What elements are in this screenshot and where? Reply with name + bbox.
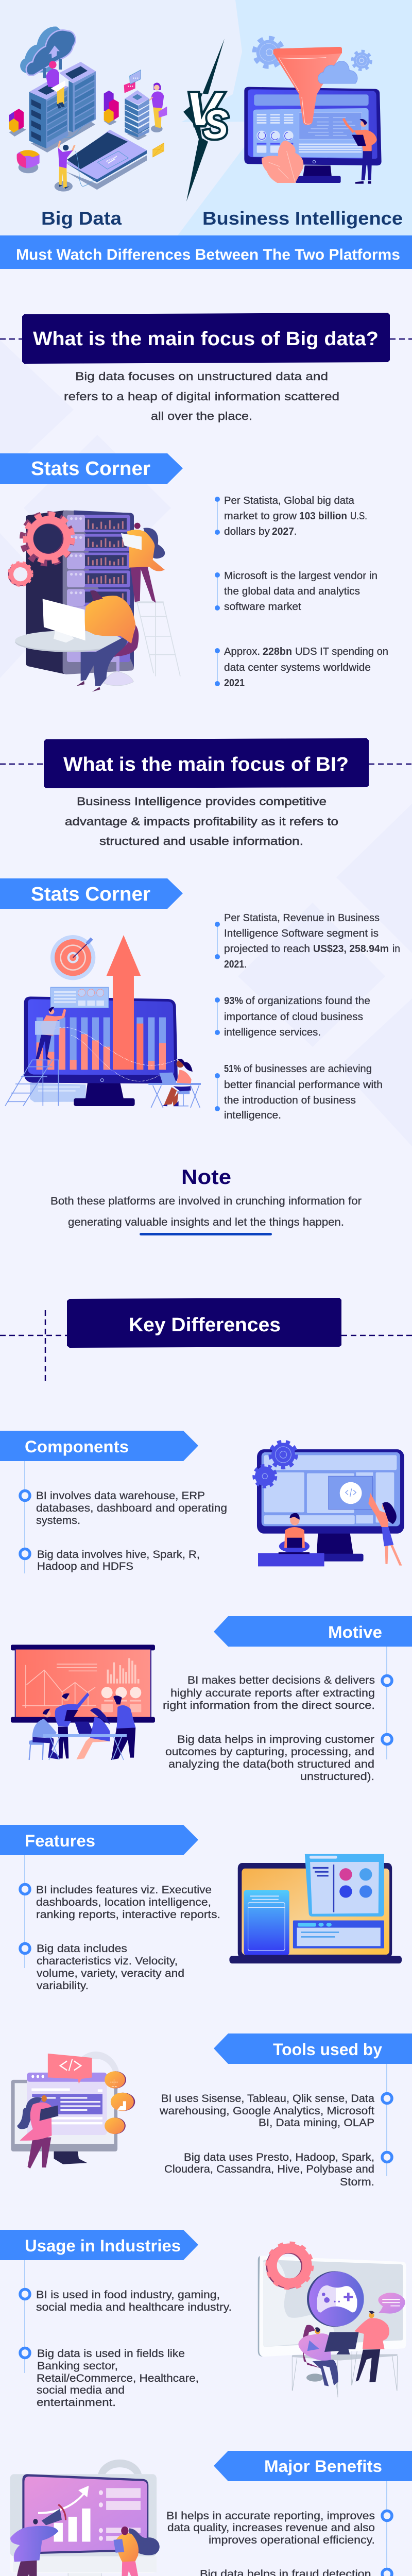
stat: global big data market: U.S. xyxy=(350,511,367,522)
text: BI features: BI includes features viz. Executive xyxy=(36,1884,212,1896)
text: BI benefits: data quality, increases revenue and also xyxy=(167,2522,375,2534)
text: big data usage: Banking sector, xyxy=(37,2360,118,2372)
stat: global big data market xyxy=(224,495,367,537)
stat: cloud BI: importance of cloud business xyxy=(224,1011,363,1023)
illustration: marketing monitor xyxy=(10,2463,160,2576)
ribbon xyxy=(0,2230,198,2260)
stat: microsoft vendor: the global data and analytics xyxy=(224,586,360,597)
stat: data center spending: 2021 xyxy=(224,677,245,689)
stat: BI software revenue: Intelligence Software segment is xyxy=(224,928,379,939)
stat: cloud BI: of organizations found the xyxy=(246,995,370,1007)
ribbon: Components xyxy=(25,1437,129,1456)
text: BI usage: social media and healthcare industry. xyxy=(36,2301,232,2313)
icon: VS lightning bolt xyxy=(183,39,228,201)
text: big data motive: unstructured). xyxy=(300,1771,374,1783)
text block: big data focus: Big data focuses on unstructured data and xyxy=(75,370,328,383)
envelope icon xyxy=(153,143,164,157)
text: BI benefits xyxy=(166,2510,375,2546)
stat: microsoft vendor: Microsoft is the largest vendor in xyxy=(224,570,377,582)
text block: BI focus: advantage & impacts profitability as it refers to xyxy=(65,815,338,828)
donut chart xyxy=(17,150,40,168)
section: features xyxy=(0,1825,402,1992)
stats list: big data xyxy=(215,495,388,689)
heading: key differences xyxy=(0,1298,412,1384)
funnel xyxy=(273,47,342,125)
standing person xyxy=(354,2311,389,2382)
text: big data tools: Cloudera, Cassandra, Hive, Polybase and xyxy=(164,2163,374,2175)
icon: VS lightning bolt: V xyxy=(186,84,224,135)
text: BI benefits: improves operational efficiency. xyxy=(209,2534,375,2546)
hero panel: big data vs business intelligence xyxy=(0,0,412,235)
cloud xyxy=(318,61,357,83)
stat: financial performance xyxy=(224,1063,383,1121)
text: BI usage: BI is used in food industry, gaming, xyxy=(36,2289,220,2301)
ribbon: stats corner BI xyxy=(0,878,183,909)
stat: data center spending: 228bn xyxy=(263,646,292,657)
text: big data features xyxy=(37,1943,184,1992)
stat: global big data market: 103 billion xyxy=(299,511,347,522)
woman xyxy=(17,2095,58,2168)
heading: main focus of big data: What is the main focus of Big data? xyxy=(33,328,379,350)
woman on ladder xyxy=(121,523,165,603)
stat: data center spending xyxy=(224,646,388,689)
tool circles xyxy=(105,2071,135,2134)
section: motive xyxy=(11,1616,412,1783)
subtitle band: Must Watch Differences Between The Two Platforms xyxy=(16,246,400,263)
woman with folder xyxy=(149,82,167,128)
ribbon: Major Benefits xyxy=(264,2457,382,2476)
stat: financial performance: better financial performance with xyxy=(224,1079,383,1091)
text block: BI focus xyxy=(65,795,338,848)
stat: financial performance: 51% xyxy=(224,1063,241,1075)
illustration: server room xyxy=(9,511,180,692)
illustration: code monitor xyxy=(254,1442,404,1566)
text block: big data focus: all over the place. xyxy=(151,410,252,422)
text: BI motive: highly accurate reports after extracting xyxy=(170,1687,375,1699)
illustration: gaming monitor xyxy=(258,2244,406,2397)
seated person xyxy=(298,2325,359,2386)
laptop xyxy=(66,130,147,190)
ribbon: Features xyxy=(25,1832,95,1850)
stat: financial performance: the introduction of business xyxy=(224,1095,356,1106)
table xyxy=(292,2351,398,2397)
stat: cloud BI xyxy=(224,995,370,1038)
stat: BI software revenue: Per Statista, Revenue in Business xyxy=(224,912,380,924)
ladder xyxy=(135,602,180,676)
note text xyxy=(50,1195,362,1228)
text: BI tools: BI uses Sisense, Tableau, Qlik sense, Data xyxy=(161,2093,374,2105)
text: BI features: ranking reports, interactive reports. xyxy=(36,1909,220,1921)
illustration: funnel monitor xyxy=(244,38,382,184)
top window xyxy=(305,1854,384,1917)
heading: main focus of big data xyxy=(0,313,412,364)
stat: microsoft vendor xyxy=(224,570,377,613)
standing woman xyxy=(368,1493,402,1566)
text: big data tools: Storm. xyxy=(340,2176,374,2188)
stat: data center spending: UDS IT spending on xyxy=(295,646,388,657)
ribbon xyxy=(214,2451,412,2481)
text block: BI focus: structured and usable information. xyxy=(99,835,303,848)
text: big data features: Big data includes xyxy=(37,1943,127,1955)
woman at desk xyxy=(148,1059,201,1108)
stat: BI software revenue: 2021 xyxy=(224,959,244,970)
text: big data components xyxy=(37,1549,200,1572)
game controller badge xyxy=(307,2271,364,2327)
text: BI components xyxy=(36,1490,227,1527)
ribbon: stats corner BI: Stats Corner xyxy=(31,884,150,905)
stat: data center spending: Approx. xyxy=(224,646,260,657)
text: BI components: databases, dashboard and operating xyxy=(36,1502,227,1514)
text: BI components: systems. xyxy=(36,1515,80,1527)
ribbon xyxy=(0,1431,198,1461)
gear xyxy=(268,2244,312,2287)
illustration: growth dashboard xyxy=(5,935,201,1108)
text: BI benefits: BI helps in accurate reporting, improves xyxy=(166,2510,375,2522)
left rack xyxy=(29,81,68,148)
note text: Both these platforms are involved in crunching information for xyxy=(50,1195,362,1207)
arrow xyxy=(107,935,141,1070)
man with tablet xyxy=(344,118,377,184)
dashboard panel xyxy=(50,987,109,1008)
text: big data features: variability. xyxy=(37,1980,89,1992)
woman with tablet xyxy=(113,2527,160,2576)
bottom window xyxy=(293,1921,384,1948)
cloud xyxy=(20,27,75,78)
stat: financial performance: intelligence. xyxy=(224,1110,281,1121)
chat bubbles xyxy=(124,70,141,93)
text: big data motive xyxy=(165,1734,374,1783)
ribbon: Usage in Industries xyxy=(25,2236,181,2255)
section: major benefits xyxy=(10,2451,412,2576)
heading: big data: Big Data xyxy=(41,208,122,229)
stat: microsoft vendor: software market xyxy=(224,601,301,613)
text: BI tools xyxy=(159,2093,374,2129)
text: BI motive: BI makes better decisions & delivers xyxy=(187,1674,375,1686)
block chart middle xyxy=(104,91,119,123)
stat: global big data market: Per Statista, Global big data xyxy=(224,495,355,506)
gears xyxy=(254,1442,297,1487)
man at desk xyxy=(76,590,135,692)
section: tools used by xyxy=(11,2033,412,2188)
stat: cloud BI: intelligence services. xyxy=(224,1027,321,1038)
man with megaphone xyxy=(10,2504,66,2576)
text block: big data focus xyxy=(64,370,339,422)
text: big data motive: Big data helps in improving customer xyxy=(177,1734,374,1745)
team xyxy=(29,1692,135,1760)
right rack xyxy=(59,62,96,132)
stat: BI software revenue: in xyxy=(392,943,400,955)
monitor xyxy=(24,996,178,1106)
ribbon: stats corner: Stats Corner xyxy=(31,458,150,480)
illustration: big data servers and laptop xyxy=(9,27,167,192)
note text: generating valuable insights and let the things happen. xyxy=(68,1216,344,1228)
text: big data usage: Retail/eCommerce, Healthcare, xyxy=(37,2372,199,2384)
sitting man xyxy=(279,1513,310,1554)
left window xyxy=(244,1890,289,1955)
illustration: team presentation xyxy=(11,1645,155,1760)
gears xyxy=(9,514,72,586)
text block: BI focus: Business Intelligence provides competitive xyxy=(77,795,327,808)
server stack xyxy=(125,90,149,138)
desk with monitor xyxy=(15,599,122,652)
ladder xyxy=(5,1060,59,1106)
stat: global big data market: dollars by xyxy=(224,526,270,537)
text: BI usage xyxy=(36,2289,232,2313)
stat: cloud BI: 93% xyxy=(224,995,243,1007)
block chart left xyxy=(9,109,24,132)
speech bubble xyxy=(378,2293,405,2314)
text: big data tools xyxy=(164,2151,374,2188)
monitor xyxy=(244,87,382,183)
ribbon xyxy=(0,1825,198,1855)
text: big data usage: entertainment. xyxy=(37,2397,116,2409)
illustration: laptop with windows xyxy=(229,1854,402,1963)
stat: financial performance: of businesses are achieving xyxy=(244,1063,372,1075)
chair xyxy=(104,625,139,686)
heading: main focus of BI: What is the main focus of BI? xyxy=(63,754,349,775)
text: BI components: BI involves data warehouse, ERP xyxy=(36,1490,205,1502)
text: big data motive: analyzing the data(both structured and xyxy=(168,1758,374,1770)
note section xyxy=(50,1166,362,1235)
code bubble xyxy=(48,2054,92,2084)
stat: BI software revenue: projected to reach xyxy=(224,943,310,955)
stat: data center spending: data center systems worldwide xyxy=(224,662,371,673)
section: components xyxy=(0,1431,404,1573)
stat: global big data market: market to grow xyxy=(224,511,297,522)
subtitle band xyxy=(0,235,412,269)
text: big data tools: Big data uses Presto, Hadoop, Spark, xyxy=(184,2151,374,2163)
text: big data usage: social media and xyxy=(37,2384,125,2396)
text: big data features: characteristics viz. Velocity, xyxy=(37,1955,178,1967)
text: BI motive: right information from the direct source. xyxy=(163,1700,375,1711)
person at laptop xyxy=(58,141,75,189)
leaf xyxy=(262,141,303,183)
text: big data usage: Big data is used in fields like xyxy=(37,2348,185,2360)
text block: big data focus: refers to a heap of digital information scattered xyxy=(64,390,339,403)
stat: global big data market: . xyxy=(294,526,297,537)
heading: business intelligence: Business Intelligence xyxy=(202,208,403,229)
note heading: Note xyxy=(181,1166,231,1189)
stats list: BI xyxy=(215,912,400,1121)
text: BI motive xyxy=(163,1674,375,1711)
text: BI tools: warehousing, Google Analytics, Microsoft xyxy=(159,2105,374,2117)
text: big data motive: outcomes by capturing, processing, and xyxy=(165,1746,374,1758)
man on ladder xyxy=(35,1007,66,1060)
text: big data features: volume, variety, veracity and xyxy=(37,1968,184,1979)
heading: key differences: Key Differences xyxy=(129,1314,281,1336)
section: usage in industries xyxy=(0,2230,406,2409)
ribbon xyxy=(214,1616,412,1647)
illustration: developer tools xyxy=(11,2054,135,2168)
person on rack xyxy=(46,61,65,109)
stat: BI software revenue xyxy=(224,912,400,970)
text: big data components: Hadoop and HDFS xyxy=(37,1561,133,1572)
icon: VS lightning bolt: S xyxy=(203,101,228,147)
stat: BI software revenue: . xyxy=(244,959,247,970)
gears xyxy=(254,38,371,70)
heading: main focus of BI xyxy=(0,738,412,788)
text: big data usage xyxy=(37,2348,199,2409)
target xyxy=(50,935,95,980)
ribbon: stats corner xyxy=(0,453,183,484)
stat: global big data market: 2027 xyxy=(272,526,294,537)
ribbon: Tools used by xyxy=(273,2040,382,2059)
ribbon xyxy=(214,2033,412,2064)
text: BI tools: BI, Data mining, OLAP xyxy=(259,2117,374,2129)
ribbon: Motive xyxy=(328,1623,382,1641)
bars xyxy=(37,1018,166,1070)
text: BI features: dashboards, location intelligence, xyxy=(36,1896,211,1908)
stat: BI software revenue: US$23, 258.94m xyxy=(313,943,389,955)
text: BI features xyxy=(36,1884,220,1921)
text: big data components: Big data involves hive, Spark, R, xyxy=(37,1549,200,1561)
